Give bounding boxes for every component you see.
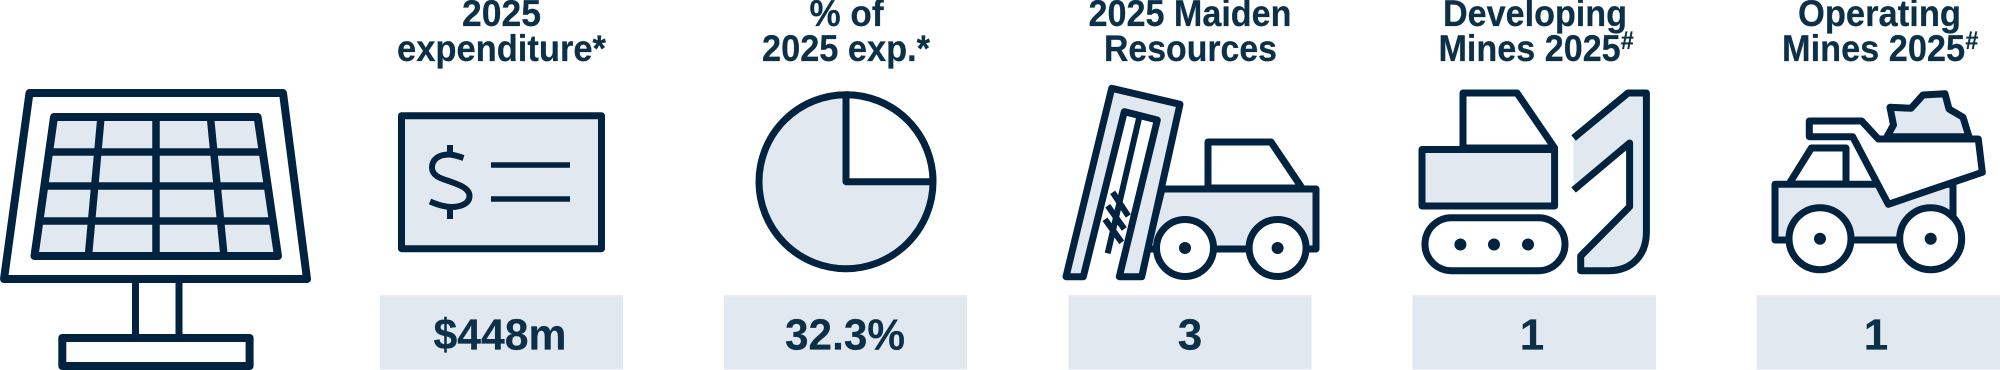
heading: Developing Mines 2025#: Mines 2025 bbox=[1438, 28, 1636, 69]
heading: 2025 expenditure: expenditure* bbox=[397, 28, 607, 69]
value box: $448m bbox=[380, 295, 623, 370]
heading: 2025 Maiden Resources: Resources bbox=[1104, 28, 1277, 69]
heading: % of 2025 exp. bbox=[762, 0, 931, 69]
heading: Operating Mines 2025#: Mines 2025 bbox=[1782, 28, 1979, 69]
heading: Developing Mines 2025#: # bbox=[1621, 27, 1634, 55]
value box: 1: 1 bbox=[1520, 310, 1544, 360]
heading: % of 2025 exp.: 2025 exp.* bbox=[762, 28, 931, 69]
value box: 1 bbox=[1757, 295, 2000, 370]
icon: solar panel bbox=[4, 93, 307, 366]
heading: 2025 expenditure bbox=[397, 0, 607, 69]
icon: dump truck bbox=[1775, 94, 1982, 270]
icon: forklift bbox=[1066, 88, 1316, 277]
value box: 1: 1 bbox=[1864, 310, 1888, 360]
value box: 3: 3 bbox=[1178, 310, 1202, 360]
heading: Operating Mines 2025# bbox=[1782, 0, 1978, 69]
value box: 1 bbox=[1412, 295, 1656, 370]
heading: Operating Mines 2025#: # bbox=[1965, 27, 1978, 55]
panel: 2025 maiden resources bbox=[1066, 0, 1316, 370]
icon: pie chart bbox=[759, 95, 933, 269]
panel: 2025 expenditure bbox=[380, 0, 623, 370]
value box: 32.3% bbox=[724, 295, 967, 370]
value box: $448m: $448m bbox=[434, 310, 566, 360]
icon: banknote with dollar sign bbox=[402, 116, 602, 249]
panel: percent of 2025 expenditure bbox=[724, 0, 967, 370]
value box: 3 bbox=[1068, 295, 1312, 370]
heading: 2025 Maiden Resources bbox=[1088, 0, 1292, 69]
value box: 32.3%: 32.3% bbox=[785, 310, 905, 360]
panel: developing mines 2025 bbox=[1412, 0, 1656, 370]
icon: excavator bbox=[1422, 93, 1646, 271]
panel: operating mines 2025 bbox=[1757, 0, 2000, 370]
heading: Developing Mines 2025# bbox=[1438, 0, 1634, 69]
